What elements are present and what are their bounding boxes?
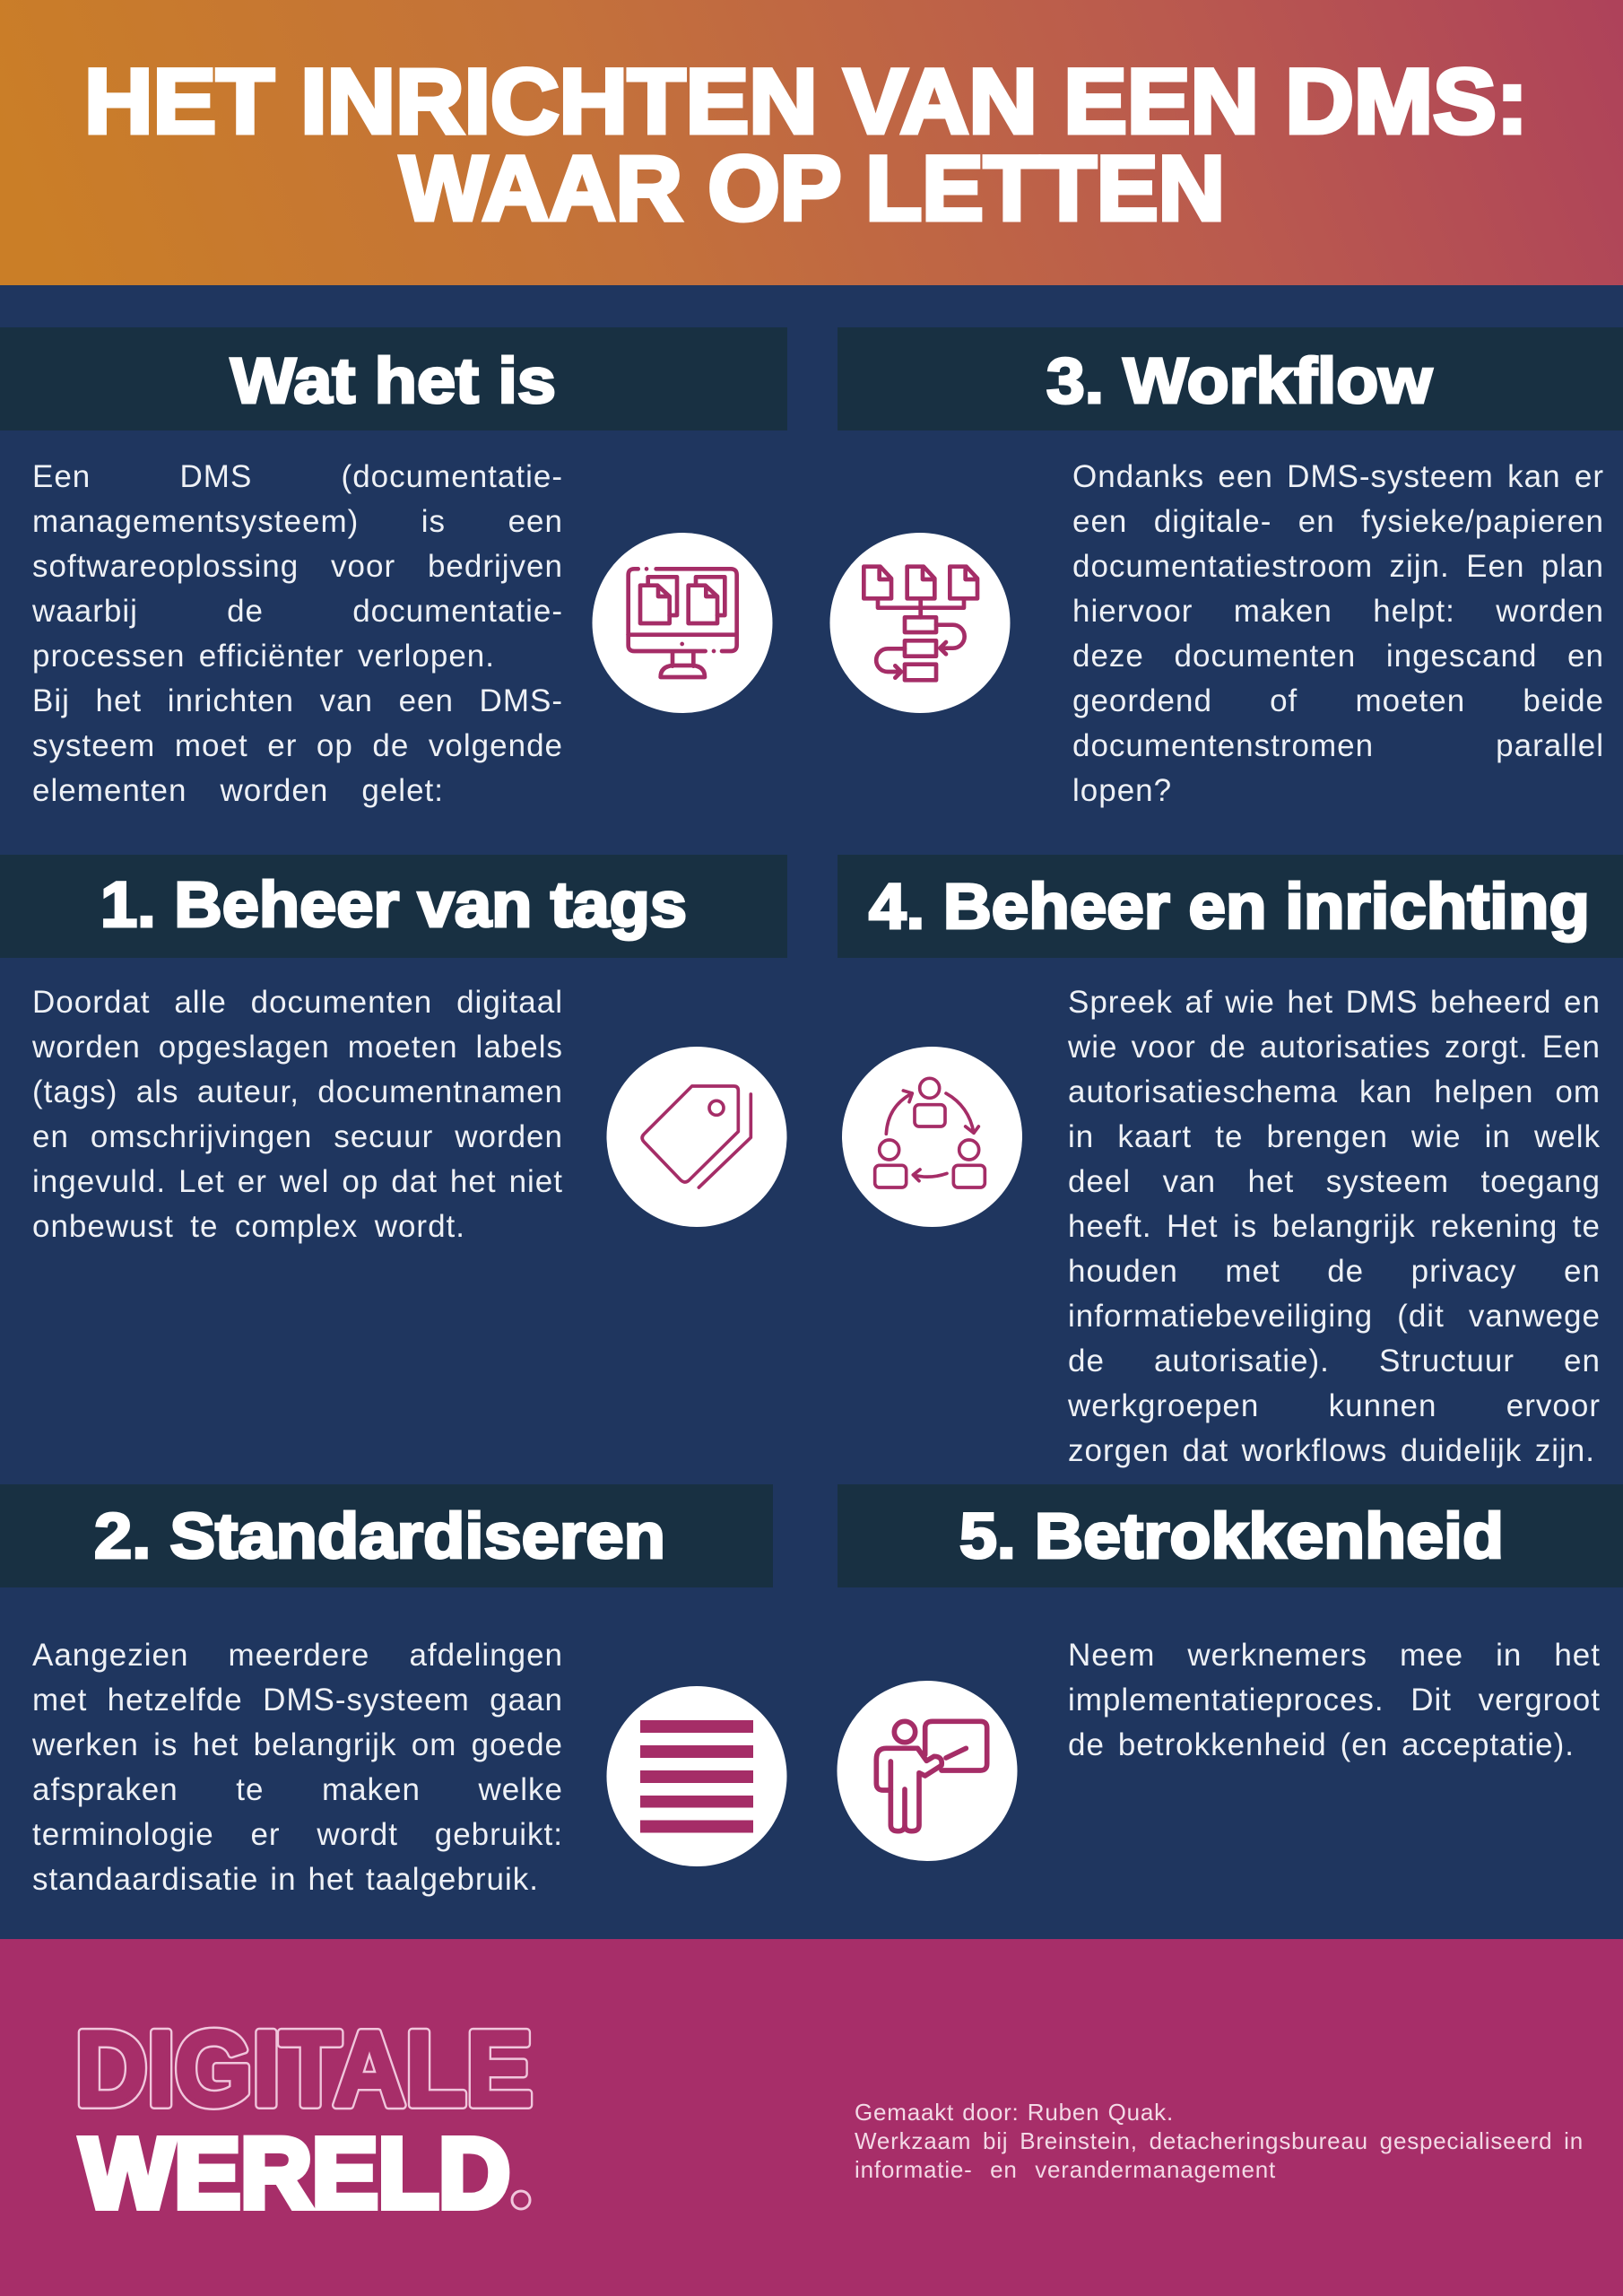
text block: Workflow: lopen? <box>1072 773 1172 808</box>
icon: five horizontal lines <box>606 1686 787 1866</box>
text block: Beheer van tags: onbewust te complex wordt. <box>32 1209 465 1244</box>
header banner <box>0 0 1623 285</box>
icon: monitor with documents <box>592 533 773 713</box>
text block: Standardiseren: werken is het belangrijk om goede <box>32 1727 563 1762</box>
text block: Workflow: geordend of moeten beide <box>1072 683 1604 718</box>
text block: Beheer van tags: en omschrijvingen secuur worden <box>32 1119 563 1154</box>
title <box>84 50 1528 239</box>
text block: Beheer en inrichting: Spreek af wie het DMS beheerd en <box>1068 985 1601 1019</box>
text block: Beheer van tags: ingevuld. Let er wel op dat het niet <box>32 1164 563 1199</box>
heading: 4. Beheer en inrichting: 4. Beheer en inrichting <box>869 872 1590 943</box>
text block: Wat het is: processen efficiënter verlopen. <box>32 639 495 674</box>
text block: Wat het is: systeem moet er op de volgende <box>32 728 563 763</box>
text block: Wat het is: managementsysteem) is een <box>32 504 563 539</box>
heading: 4. Beheer en inrichting <box>838 855 1623 958</box>
icon: price tags <box>606 1047 787 1227</box>
icon: document workflow <box>830 533 1010 713</box>
text block: Betrokkenheid: Neem werknemers mee in het <box>1068 1638 1601 1672</box>
heading: 3. Workflow: 3. Workflow <box>1046 346 1433 417</box>
text block: Workflow: Ondanks een DMS-systeem kan er <box>1072 459 1604 493</box>
text block: Standardiseren: Aangezien meerdere afdelingen <box>32 1638 563 1672</box>
text block: Workflow <box>1072 459 1604 808</box>
text block: Betrokkenheid: de betrokkenheid (en acceptatie). <box>1068 1727 1575 1762</box>
text block: Workflow: documentenstromen parallel <box>1072 728 1604 763</box>
text block: Beheer van tags <box>32 985 563 1244</box>
text block: Beheer en inrichting: wie voor de autorisaties zorgt. Een <box>1068 1030 1601 1065</box>
text block: Standardiseren: met hetzelfde DMS-systeem gaan <box>32 1683 563 1718</box>
text block: Beheer en inrichting <box>1068 985 1601 1468</box>
text block: Betrokkenheid: implementatieproces. Dit vergroot <box>1068 1683 1601 1718</box>
footer credit text: informatie- en verandermanagement <box>855 2156 1276 2183</box>
heading: 5. Betrokkenheid <box>838 1484 1623 1587</box>
title: HET INRICHTEN VAN EEN DMS: <box>84 50 1528 152</box>
text block: Beheer en inrichting: in kaart te brengen wie in welk <box>1068 1119 1601 1154</box>
text block: Beheer en inrichting: deel van het systeem toegang <box>1068 1164 1601 1199</box>
heading: Wat het is <box>0 327 787 430</box>
text block: Wat het is: Een DMS (documentatie- <box>32 459 563 493</box>
heading: Wat het is: Wat het is <box>230 346 556 417</box>
text block: Wat het is: waarbij de documentatie- <box>32 594 563 629</box>
text block: Workflow: documentatiestroom zijn. Een plan <box>1072 549 1604 584</box>
text block: Beheer en inrichting: zorgen dat workflows duidelijk zijn. <box>1068 1433 1595 1468</box>
text block: Standardiseren: standaardisatie in het taalgebruik. <box>32 1862 539 1897</box>
text block: Beheer en inrichting: werkgroepen kunnen ervoor <box>1068 1388 1601 1423</box>
heading: 2. Standardiseren <box>0 1484 773 1587</box>
text block: Wat het is: elementen worden gelet: <box>32 773 444 808</box>
footer credit text <box>855 2099 1584 2183</box>
text block: Beheer en inrichting: informatiebeveiliging (dit vanwege <box>1068 1299 1601 1334</box>
text block: Wat het is: Bij het inrichten van een DMS- <box>32 683 563 718</box>
text block: Beheer en inrichting: de autorisatie). Structuur en <box>1068 1344 1601 1378</box>
text block: Standardiseren: terminologie er wordt gebruikt: <box>32 1817 563 1852</box>
text block: Workflow: deze documenten ingescand en <box>1072 639 1604 674</box>
text block: Beheer van tags: Doordat alle documenten digitaal <box>32 985 563 1019</box>
heading: 1. Beheer van tags: 1. Beheer van tags <box>100 870 687 941</box>
text block: Standardiseren <box>32 1638 563 1897</box>
text block: Beheer en inrichting: houden met de privacy en <box>1068 1254 1601 1289</box>
title: WAAR OP LETTEN <box>400 137 1225 239</box>
footer band <box>0 1939 1623 2296</box>
heading: 2. Standardiseren: 2. Standardiseren <box>94 1501 665 1572</box>
heading: 5. Betrokkenheid: 5. Betrokkenheid <box>959 1501 1504 1572</box>
text block: Beheer en inrichting: autorisatieschema kan helpen om <box>1068 1074 1601 1109</box>
text block: Standardiseren: afspraken te maken welke <box>32 1772 563 1807</box>
text block: Wat het is: softwareoplossing voor bedrijven <box>32 549 563 584</box>
icon: three people in cycle <box>842 1047 1022 1227</box>
logo: Digitale Wereld <box>75 2010 533 2229</box>
heading: 3. Workflow <box>838 327 1623 430</box>
text block: Workflow: hiervoor maken helpt: worden <box>1072 594 1604 629</box>
text block: Workflow: een digitale- en fysieke/papieren <box>1072 504 1604 539</box>
heading: 1. Beheer van tags <box>0 855 787 958</box>
footer credit text: Gemaakt door: Ruben Quak. <box>855 2099 1174 2126</box>
logo: Digitale Wereld: DIGITALE <box>75 2010 533 2128</box>
icon: presenter at board <box>838 1681 1017 1861</box>
text block: Wat het is <box>32 459 563 808</box>
text block: Beheer van tags: (tags) als auteur, documentnamen <box>32 1074 563 1109</box>
text block: Beheer en inrichting: heeft. Het is belangrijk rekening te <box>1068 1209 1601 1244</box>
text block: Beheer van tags: worden opgeslagen moeten labels <box>32 1030 563 1065</box>
footer credit text: Werkzaam bij Breinstein, detacheringsbureau gespecialiseerd in <box>855 2127 1584 2154</box>
text block: Betrokkenheid <box>1068 1638 1601 1762</box>
logo: Digitale Wereld: WERELD <box>81 2118 510 2229</box>
logo: Digitale Wereld: DIGITALE <box>75 2010 533 2128</box>
